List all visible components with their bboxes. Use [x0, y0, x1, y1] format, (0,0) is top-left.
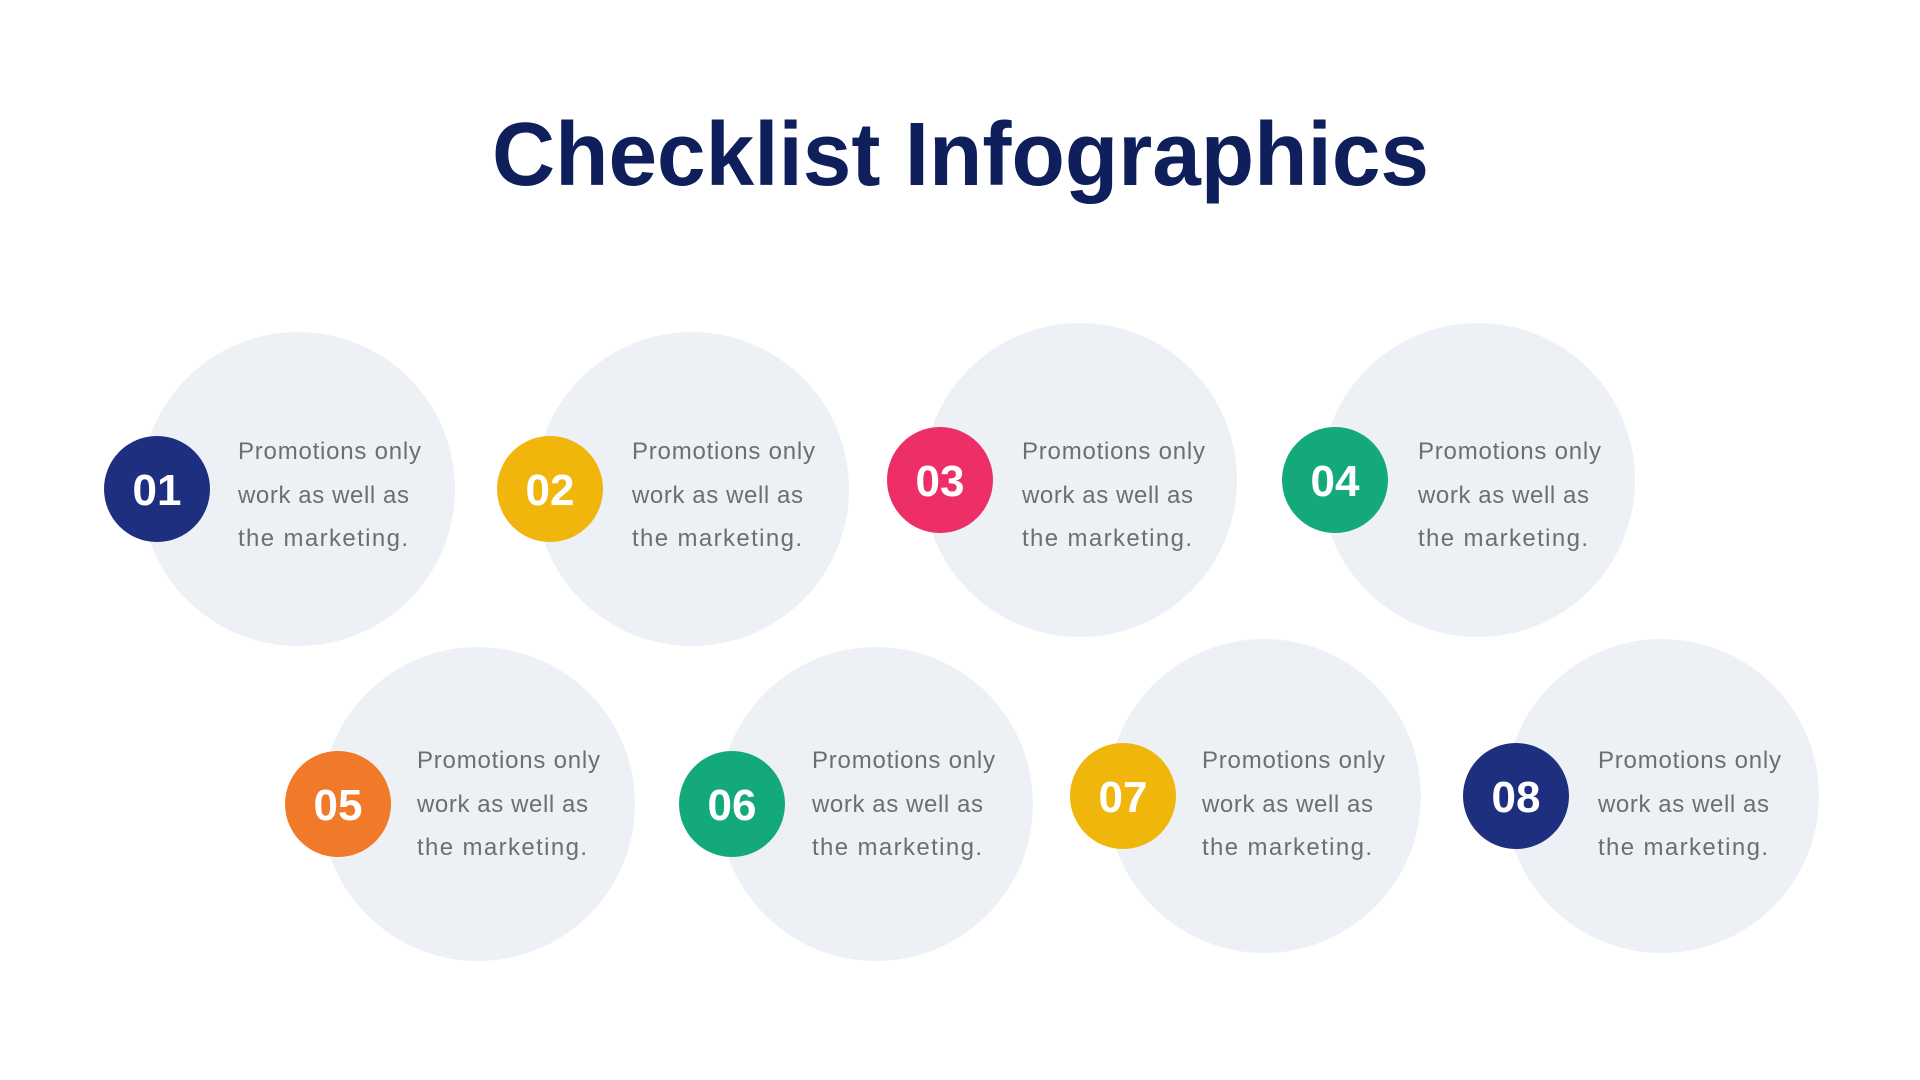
item 06: 06: [708, 781, 756, 830]
item 08: work as well as: [1597, 791, 1769, 818]
item 03: the marketing.: [1022, 525, 1192, 552]
item 01: 01: [133, 466, 181, 515]
item 05: work as well as: [416, 791, 588, 818]
item 01: work as well as: [237, 482, 409, 509]
item 03: 03: [916, 457, 964, 506]
item 04: work as well as: [1417, 482, 1589, 509]
item 07: Promotions only: [1202, 747, 1385, 774]
item 07: work as well as: [1201, 791, 1373, 818]
item 08: the marketing.: [1598, 834, 1768, 861]
item 03: Promotions only: [1022, 438, 1205, 465]
item 05: the marketing.: [417, 834, 587, 861]
item 02: [497, 332, 849, 646]
item 01: the marketing.: [238, 525, 408, 552]
item 02: Promotions only: [632, 438, 815, 465]
item 07: the marketing.: [1202, 834, 1372, 861]
item 02: the marketing.: [632, 525, 802, 552]
item 02: work as well as: [631, 482, 803, 509]
item 07: [1070, 639, 1421, 953]
item 04: the marketing.: [1418, 525, 1588, 552]
item 06: Promotions only: [812, 747, 995, 774]
item 01: [104, 332, 455, 646]
item 07: 07: [1099, 773, 1147, 822]
item 08: Promotions only: [1598, 747, 1781, 774]
item 06: [679, 647, 1033, 961]
item 05: Promotions only: [417, 747, 600, 774]
item 04: [1282, 323, 1635, 637]
item 01: Promotions only: [238, 438, 421, 465]
item 04: 04: [1311, 457, 1360, 506]
item 05: 05: [314, 781, 362, 830]
item 08: 08: [1492, 773, 1540, 822]
item 02: 02: [526, 466, 574, 515]
title: Checklist Infographics: [492, 105, 1429, 205]
item 03: [887, 323, 1237, 637]
item 04: Promotions only: [1418, 438, 1601, 465]
item 06: work as well as: [811, 791, 983, 818]
item 03: work as well as: [1021, 482, 1193, 509]
item 05: [285, 647, 635, 961]
item 08: [1463, 639, 1819, 953]
item 06: the marketing.: [812, 834, 982, 861]
